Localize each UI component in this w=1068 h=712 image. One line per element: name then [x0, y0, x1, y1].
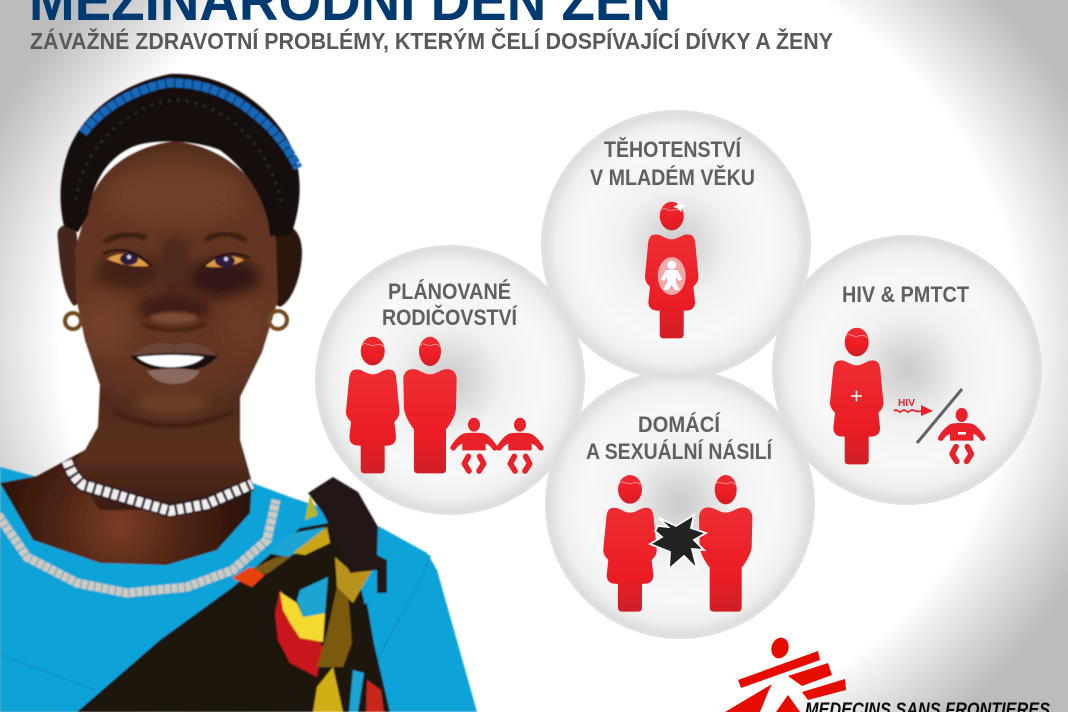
panel: family planning	[315, 245, 585, 515]
icon: man	[699, 475, 752, 612]
icon: pregnant girl	[645, 201, 698, 338]
beaded collar	[0, 500, 276, 593]
logo: Médecins Sans Frontières	[725, 635, 1050, 712]
necklace	[67, 461, 252, 511]
dress fold lines	[0, 555, 430, 690]
photo: smiling woman in blue dress	[0, 74, 477, 712]
icon: woman	[603, 475, 657, 612]
heading: violence: DOMÁCÍ	[638, 412, 721, 437]
face	[75, 141, 278, 428]
arrow: HIV transmission blocked: HIV	[898, 398, 915, 409]
ear right	[268, 226, 302, 307]
blue dress	[0, 466, 477, 712]
heading: teenage pregnancy: TĚHOTENSTVÍ	[604, 137, 742, 162]
icon: man	[403, 337, 457, 473]
heading: teenage pregnancy	[590, 137, 755, 190]
logo mark: running figure	[725, 635, 846, 712]
heading: family planning: PLÁNOVANÉ	[388, 279, 511, 304]
mouth	[130, 343, 218, 384]
nose	[138, 293, 210, 331]
icon: woman	[346, 337, 399, 473]
earrings	[65, 311, 287, 329]
heading: family planning	[382, 279, 518, 330]
heading: family planning: RODIČOVSTVÍ	[382, 305, 518, 330]
neck	[70, 370, 252, 510]
icon: HIV positive woman	[830, 328, 883, 464]
arrow: HIV transmission blocked	[894, 389, 962, 443]
chest	[0, 440, 252, 565]
hair braids	[76, 100, 282, 205]
panel: teenage pregnancy	[541, 110, 811, 380]
icon: protected baby	[938, 408, 985, 461]
icon: baby two	[496, 418, 544, 471]
panel: domestic and sexual violence	[545, 369, 815, 639]
eyes and brows	[103, 234, 250, 268]
heading: teenage pregnancy: V MLADÉM VĚKU	[590, 165, 755, 190]
blue braid	[83, 83, 298, 168]
icon: baby one	[450, 418, 498, 471]
subtitle: ZÁVAŽNÉ ZDRAVOTNÍ PROBLÉMY, KTERÝM ČELÍ DOSPÍVAJÍCÍ DÍVKY A ŽENY	[30, 27, 833, 54]
hair	[61, 74, 300, 236]
chin crease	[115, 412, 232, 426]
heading: violence: A SEXUÁLNÍ NÁSILÍ	[586, 439, 773, 464]
heading: HIV and PMTCT: HIV & PMTCT	[842, 282, 969, 307]
patterned scarf	[77, 477, 390, 712]
heading: violence	[586, 412, 773, 464]
panel: HIV and PMTCT	[772, 235, 1042, 505]
ear left	[57, 225, 84, 306]
icon: impact burst	[650, 515, 706, 569]
